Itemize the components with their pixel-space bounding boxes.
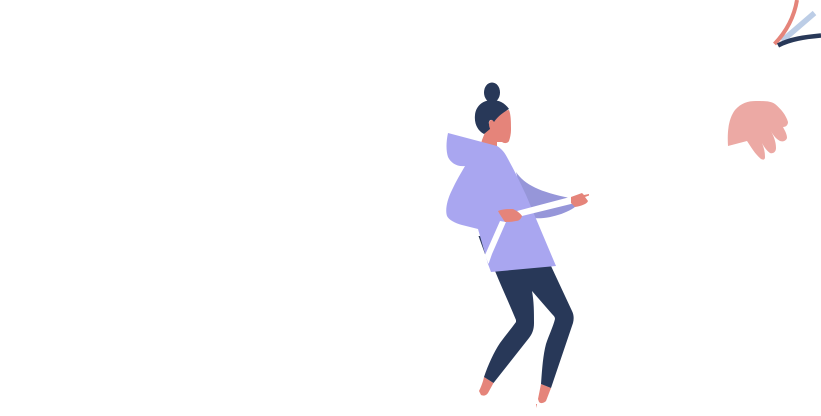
icon: pink leaf [728,101,788,160]
ear [489,120,494,128]
hair [475,100,509,134]
neck and face [481,110,511,148]
leggings [484,266,574,388]
figure: woman [446,82,589,408]
dark sliver behind hoodie [478,236,486,254]
feet [479,377,551,408]
white strap: diagonal [485,221,506,264]
icon: plant stems [774,0,821,46]
white strap: sleeve [517,197,575,216]
near hand [498,209,522,222]
bun [484,82,500,102]
far hand [571,193,589,207]
far arm [516,172,578,218]
hoodie body [446,133,556,272]
